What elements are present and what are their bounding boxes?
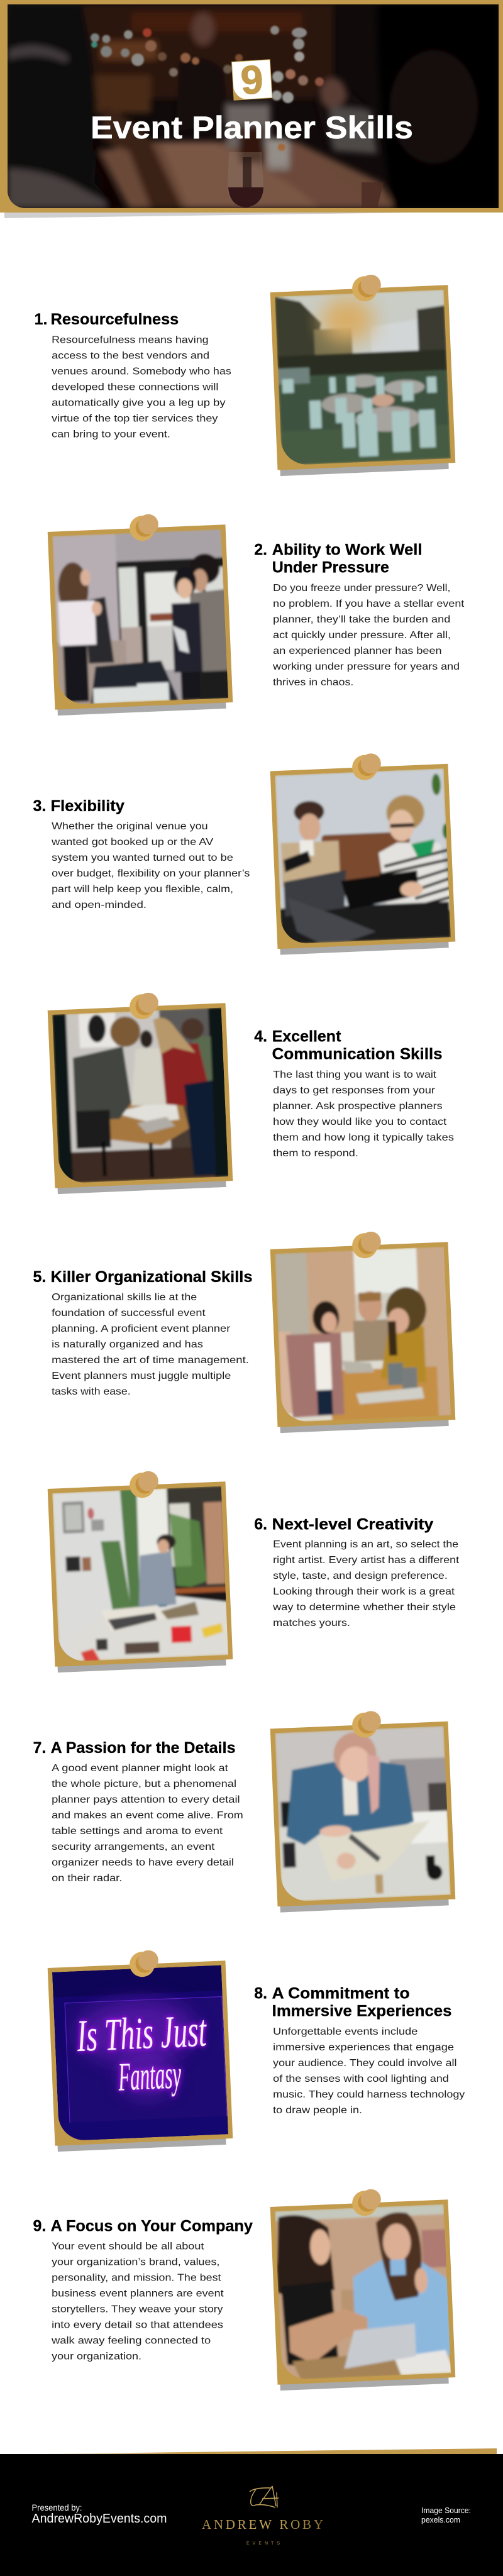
body text: tasks with ease. xyxy=(52,1386,131,1397)
panel: skill 8 A Commitment to Immersive Experiences xyxy=(47,1947,465,2152)
body text: no problem. If you have a stellar event xyxy=(273,599,465,609)
body text: immersive experiences that engage xyxy=(273,2042,454,2053)
body text: matches yours. xyxy=(273,1618,350,1628)
panel: skill 6 Next-level Creativity xyxy=(47,1468,460,1672)
body text: an experienced planner has been xyxy=(273,646,442,656)
body text: planner pays attention to every detail xyxy=(52,1794,240,1805)
panel: header banner xyxy=(0,0,503,218)
body text: system you wanted turned out to be xyxy=(52,853,233,863)
heading: 6. xyxy=(254,1516,267,1534)
body text: wanted got booked up or the AV xyxy=(51,837,214,848)
body text xyxy=(52,1763,243,1884)
logo: Andrew Roby Events: EVENTS xyxy=(246,2541,280,2546)
body text: act quickly under pressure. After all, xyxy=(273,630,451,641)
heading: 9. xyxy=(33,2217,46,2235)
body text: foundation of successful event xyxy=(52,1308,206,1318)
presented by xyxy=(31,2502,167,2526)
body text: working under pressure for years and xyxy=(272,661,460,672)
badge: number 9 xyxy=(231,56,272,104)
body text: part will help keep you flexible, calm, xyxy=(52,884,233,895)
heading: A Commitment to xyxy=(272,1985,410,2003)
presented by: Presented by: xyxy=(31,2502,82,2512)
heading: 4. xyxy=(254,1028,267,1046)
body text: your organization. xyxy=(52,2352,141,2362)
body text: Your event should be all about xyxy=(52,2242,204,2252)
heading: 1. xyxy=(35,311,47,328)
icon: pin xyxy=(129,992,159,1020)
body text xyxy=(272,1539,460,1628)
body text: style, taste, and design preference. xyxy=(273,1571,448,1581)
body text xyxy=(273,2026,465,2116)
icon: pin xyxy=(351,2189,382,2216)
body text xyxy=(52,1292,249,1397)
icon: pin xyxy=(351,274,382,302)
body text: of the senses with cool lighting and xyxy=(273,2074,449,2084)
body text: Whether the original venue you xyxy=(52,821,208,832)
body text xyxy=(52,334,231,439)
body text: days to get responses from your xyxy=(273,1085,436,1096)
logo: Andrew Roby Events: ANDREW ROBY xyxy=(202,2517,323,2532)
body text xyxy=(51,2242,224,2362)
body text: virtue of the top tier services they xyxy=(52,413,218,424)
body text xyxy=(273,1070,454,1159)
body text: walk away feeling connected to xyxy=(51,2336,211,2347)
body text: The last thing you want is to wait xyxy=(273,1070,437,1080)
heading: Killer Organizational Skills xyxy=(51,1268,252,1286)
body text: Unforgettable events include xyxy=(273,2026,417,2037)
body text: over budget, flexibility on your planner’s xyxy=(52,868,250,879)
neon sign text xyxy=(75,2006,210,2101)
heading xyxy=(254,1985,451,2020)
body text: them and how long it typically takes xyxy=(273,1132,454,1143)
body text: to draw people in. xyxy=(273,2105,362,2116)
heading: 3. xyxy=(33,797,46,815)
panel: skill 2 Ability to Work Well Under Pressure xyxy=(47,511,465,716)
heading xyxy=(254,541,423,577)
icon: pin xyxy=(351,1711,382,1739)
body text: automatically give you a leg up by xyxy=(52,397,226,408)
badge: number 9: 9 xyxy=(240,57,265,103)
icon: pin xyxy=(129,1950,159,1977)
heading: 8. xyxy=(254,1985,267,2003)
heading: Under Pressure xyxy=(272,559,389,577)
photo card: artist in plant-filled studio xyxy=(47,1468,233,1672)
body text: personality, and mission. The best xyxy=(52,2273,221,2284)
body text: can bring to your event. xyxy=(52,429,170,439)
body text: planner, they’ll take the burden and xyxy=(273,614,450,625)
body text: A good event planner might look at xyxy=(52,1763,228,1774)
icon: pin xyxy=(129,514,159,541)
photo card: women talking at registration table xyxy=(47,511,235,716)
heading: 7. xyxy=(33,1739,46,1757)
body text: thrives in chaos. xyxy=(273,677,353,688)
banner photo: restaurant bokeh xyxy=(8,4,499,208)
photo card: woman sketching in notebook xyxy=(270,1708,456,1913)
body text: organizer needs to have every detail xyxy=(52,1857,234,1868)
body text: right artist. Every artist has a different xyxy=(273,1555,460,1566)
body text: is naturally organized and has xyxy=(52,1339,203,1350)
body text: how they would like you to contact xyxy=(273,1117,447,1127)
body text: the whole picture, but a phenomenal xyxy=(52,1779,236,1789)
photo card: colleagues at wooden table xyxy=(270,1229,456,1433)
panel: skill 3 Flexibility xyxy=(33,750,456,955)
body text: planner. Ask prospective planners xyxy=(273,1101,443,1112)
photo card: outdoor wedding tables xyxy=(270,272,456,476)
body text: Organizational skills lie at the xyxy=(52,1292,197,1303)
body text: way to determine whether their style xyxy=(272,1602,456,1613)
neon sign text: Is This Just xyxy=(75,2006,208,2061)
heading: 2. xyxy=(254,541,267,559)
body text: access to the best vendors and xyxy=(52,350,209,361)
body text xyxy=(51,821,250,910)
heading: 5. xyxy=(33,1268,46,1286)
photo card: team around a table xyxy=(47,990,233,1194)
title: Event Planner Skills xyxy=(91,110,413,145)
body text: table settings and aroma to event xyxy=(52,1826,223,1837)
icon: pin xyxy=(129,1471,159,1498)
panel: skill 7 A Passion for the Details xyxy=(33,1708,456,1913)
icon: pin xyxy=(351,1231,382,1259)
body text: mastered the art of time management. xyxy=(52,1355,249,1366)
panel: footer xyxy=(0,2448,503,2576)
heading: A Passion for the Details xyxy=(51,1739,235,1757)
body text: Looking through their work is a great xyxy=(273,1586,455,1597)
body text: music. They could harness technology xyxy=(273,2089,465,2100)
heading: Flexibility xyxy=(51,797,124,815)
heading: Immersive Experiences xyxy=(272,2003,451,2020)
heading: Excellent xyxy=(272,1028,341,1046)
body text: venues around. Somebody who has xyxy=(52,366,231,377)
body text: into every detail so that attendees xyxy=(52,2320,223,2331)
body text: your audience. They could involve all xyxy=(273,2058,456,2069)
panel: skill 1 Resourcefulness xyxy=(35,272,456,476)
body text: storytellers. They weave your story xyxy=(52,2304,223,2315)
heading: A Focus on Your Company xyxy=(51,2217,253,2235)
body text: them to respond. xyxy=(273,1148,358,1159)
body text: and makes an event come alive. From xyxy=(52,1810,243,1821)
image source: pexels.com xyxy=(421,2515,460,2524)
icon: pin xyxy=(351,753,382,781)
image source: Image Source: xyxy=(421,2506,471,2515)
logo: Andrew Roby Events xyxy=(202,2486,323,2546)
body text: Event planners must juggle multiple xyxy=(52,1371,231,1381)
body text: Resourcefulness means having xyxy=(52,334,209,345)
body text: business event planners are event xyxy=(52,2289,224,2299)
body text: planning. A proficient event planner xyxy=(52,1324,231,1334)
heading: Ability to Work Well xyxy=(272,541,423,559)
body text: Do you freeze under pressure? Well, xyxy=(273,583,450,594)
panel: skill 5 Killer Organizational Skills xyxy=(33,1229,456,1433)
image source xyxy=(421,2506,471,2524)
heading: Next-level Creativity xyxy=(272,1516,433,1534)
heading: Resourcefulness xyxy=(51,311,179,328)
panel: skill 4 Excellent Communication Skills xyxy=(47,990,454,1194)
body text: security arrangements, an event xyxy=(52,1842,215,1852)
body text: your organization’s brand, values, xyxy=(52,2257,219,2268)
photo card: purple neon sign xyxy=(47,1947,233,2152)
body text: Event planning is an art, so select the xyxy=(273,1539,458,1550)
neon sign text: Fantasy xyxy=(117,2052,182,2099)
body text: on their radar. xyxy=(52,1873,122,1884)
body text: developed these connections will xyxy=(52,382,218,392)
photo card: two women talking over laptop xyxy=(270,2186,456,2391)
photo card: man and woman with laptops xyxy=(270,750,456,955)
heading: Communication Skills xyxy=(272,1046,443,1063)
heading xyxy=(254,1028,443,1063)
wine glass xyxy=(228,152,263,207)
presented by: AndrewRobyEvents.com xyxy=(31,2512,167,2526)
body text: and open-minded. xyxy=(52,900,146,910)
panel: skill 9 A Focus on Your Company xyxy=(33,2186,456,2391)
body text xyxy=(272,583,465,688)
